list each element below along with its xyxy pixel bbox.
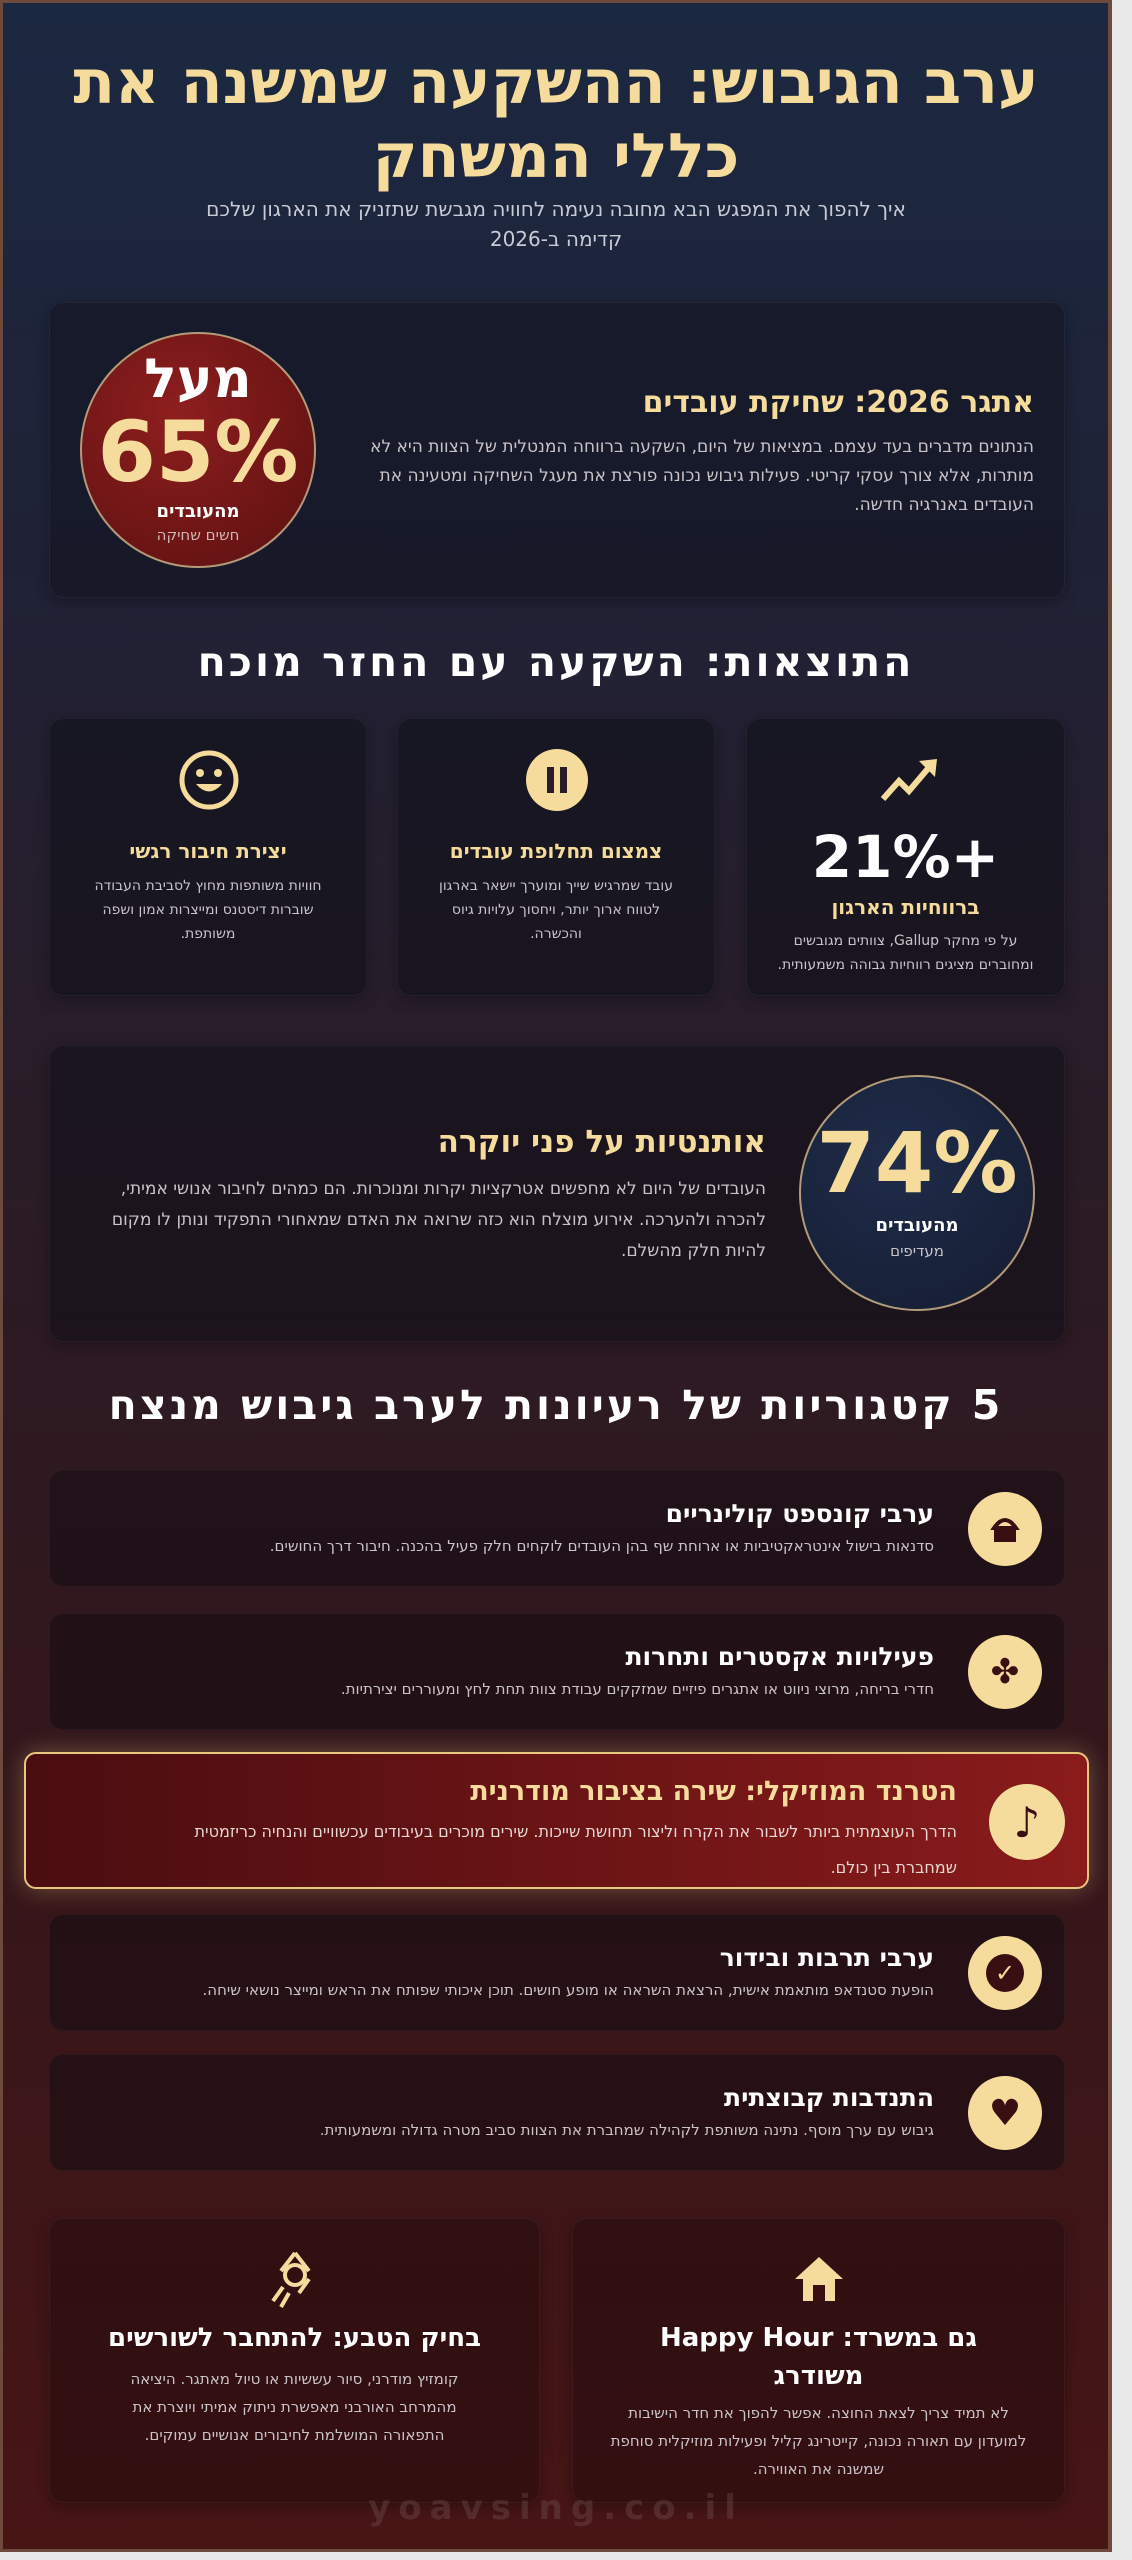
row: music highlight xyxy=(24,1752,1089,1889)
panel: happy hour xyxy=(572,2218,1065,2503)
panel: authenticity: אותנטיות על פני יוקרה xyxy=(438,1124,766,1160)
panel: turnover: עובד שמרגיש שייך ומוערך יישאר בארגון לטווח ארוך יותר, ויחסוך עלויות גיוס והכשרה. xyxy=(439,878,673,942)
icon: check xyxy=(968,1936,1042,2010)
stat circle 74% xyxy=(799,1075,1035,1311)
row: volunteering: התנדבות קבוצתית xyxy=(724,2083,934,2112)
section heading: categories: 5 קטגוריות של רעיונות לערב גיבוש מנצח xyxy=(109,1381,1003,1429)
row: culinary: ערבי קונספט קולינריים xyxy=(666,1499,934,1528)
title xyxy=(73,47,1039,192)
icon: puzzle: ✤ xyxy=(991,1652,1019,1692)
panel: profit xyxy=(746,718,1065,996)
title: כללי המשחק xyxy=(373,121,739,192)
panel: nature xyxy=(49,2218,540,2503)
row: culture: הופעת סטנדאפ מותאמת אישית, הרצאת השראה או מופע חושים. תוכן איכותי שפותח את הראש ומייצר נושאי שיחה. xyxy=(203,1981,934,1999)
icon: house xyxy=(795,2257,843,2301)
row: extreme: פעילויות אקסטרים ותחרות xyxy=(625,1642,934,1671)
icon: music note: ♪ xyxy=(1014,1798,1040,1846)
stat circle 65%: 65% xyxy=(97,402,299,500)
panel: profit: על פי מחקר Gallup, צוותים מגובשים ומחוברים מציגים רווחיות גבוהה משמעותית. xyxy=(778,933,1033,973)
panel: emotional: חוויות משותפות מחוץ לסביבת העבודה שוברות דיסטנס ומייצרות אמון ושפה משותפת. xyxy=(94,878,322,942)
icon: pause xyxy=(526,749,588,811)
icon: check: ✓ xyxy=(995,1959,1015,1987)
row: extreme: חדרי בריחה, מרוצי ניווט או אתגרים פיזיים שמזקקים עבודת צוות תחת לחץ ומעוררים יצירתיות. xyxy=(341,1680,934,1698)
icon: compass xyxy=(271,2252,311,2308)
icon: heart xyxy=(968,2076,1042,2150)
title: ערב הגיבוש: ההשקעה שמשנה את xyxy=(73,47,1039,118)
subtitle: איך להפוך את המפגש הבא מחובה נעימה לחוויה מגבשת שתזניק את הארגון שלכם קדימה ב-2026 xyxy=(206,197,906,251)
stat circle 74%: מעדיפים xyxy=(890,1242,944,1260)
panel: profit: ברווחיות הארגון xyxy=(831,895,980,919)
panel: emotional: יצירת חיבור רגשי xyxy=(129,839,287,863)
panel: turnover xyxy=(397,718,715,996)
panel: authenticity: העובדים של היום לא מחפשים אטרקציות יקרות ומנוכרות. הם כמהים לחיבור אנושי אמיתי, להכרה ולהערכה. אירוע מוצלח הוא כזה שרואה את האדם שמאחורי התפקיד ונותן לו מקום להיות חלק מהשלם. xyxy=(112,1179,766,1261)
stat circle 65%: חשים שחיקה xyxy=(157,526,239,544)
row: volunteering xyxy=(49,2054,1065,2171)
icon: trend xyxy=(880,759,937,801)
row: culinary xyxy=(49,1470,1065,1587)
stat 21%: 21%+ xyxy=(812,823,999,891)
section heading: results: התוצאות: השקעה עם החזר מוכח xyxy=(198,638,914,686)
challenge heading: אתגר 2026: שחיקת עובדים xyxy=(643,385,1034,420)
stat circle 65% xyxy=(80,332,316,568)
panel: happy hour: לא תמיד צריך לצאת החוצה. אפשר להפוך את חדר הישיבות למועדון עם תאורה נכונה, קייטרינג קליל ופעילות מוזיקלית סוחפת שמשנה את האווירה. xyxy=(611,2404,1026,2478)
stat circle 65%: מעל xyxy=(144,346,252,410)
icon: puzzle xyxy=(968,1635,1042,1709)
row: volunteering: גיבוש עם ערך מוסף. נתינה משותפת לקהילה שמחברת את הצוות סביב מטרה גדולה ומשמעותית. xyxy=(320,2121,934,2139)
panel: emotional xyxy=(49,718,367,996)
panel: turnover: צמצום תחלופת עובדים xyxy=(450,839,662,863)
row: extreme xyxy=(49,1613,1065,1730)
challenge text: הנתונים מדברים בעד עצמם. במציאות של היום, השקעה ברווחה המנטלית של הצוות היא לא מותרות, אלא צורך עסקי קריטי. פעילות גיבוש נכונה פורצת את מעגל השחיקה ומטעינה את העובדים באנרגיה חדשה. xyxy=(370,437,1034,515)
row: culture: ערבי תרבות ובידור xyxy=(720,1943,934,1972)
panel: nature: קומזיץ מודרני, סיור עששיות או טיול מאתגר. היציאה מהמרחב האורבני מאפשרת ניתוק אמיתי ויוצרת את התפאורה המושלמת לחיבורים אנושיים עמוקים. xyxy=(130,2370,459,2444)
panel: authenticity xyxy=(49,1045,1065,1342)
icon: music note xyxy=(989,1784,1065,1860)
panel: happy hour: גם במשרד: Happy Hour משודרג xyxy=(660,2323,977,2391)
row: culinary: סדנאות בישול אינטראקטיביות או ארוחת שף בהן העובדים לוקחים חלק פעיל בהכנה. חיבור דרך החושים. xyxy=(270,1537,934,1555)
stat circle 65%: מהעובדים xyxy=(157,500,239,522)
panel: challenge xyxy=(49,302,1065,598)
row: music highlight: הדרך העוצמתית ביותר לשבור את הקרח וליצור תחושת שייכות. שירים מוכרים בעיבודים עכשוויים והנחיה כריזמטית שמחברת בין כולם. xyxy=(194,1822,957,1877)
stat circle 74%: 74% xyxy=(816,1114,1018,1212)
icon: smile xyxy=(180,750,238,810)
row: music highlight: הטרנד המוזיקלי: שירה בציבור מודרנית xyxy=(470,1776,957,1807)
panel: nature: בחיק הטבע: להתחבר לשורשים xyxy=(108,2323,481,2353)
stat circle 74%: מהעובדים xyxy=(876,1214,958,1236)
icon: heart: ♥ xyxy=(989,2092,1021,2134)
icon: pot xyxy=(968,1492,1042,1566)
row: culture xyxy=(49,1914,1065,2031)
watermark: yoavsing.co.il xyxy=(368,2488,744,2528)
